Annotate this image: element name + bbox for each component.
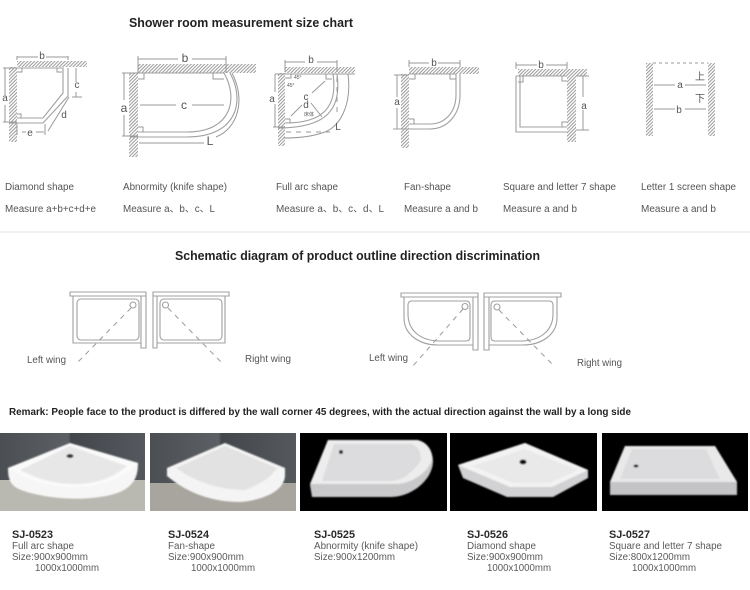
captions: screen shape: Letter 1 screen shape [641, 182, 736, 193]
product: SJ-0523: Size:900x900mm [12, 552, 88, 563]
diagram: full arc shape: 床体 [304, 111, 314, 118]
captions: square shape: Square and letter 7 shape [503, 182, 616, 193]
captions: fan shape [404, 182, 478, 215]
captions: full arc shape [276, 182, 384, 215]
diagram: letter 1 screen shape: 下 [695, 94, 705, 105]
product: SJ-0525 [314, 529, 418, 563]
captions: square shape [503, 182, 616, 215]
diagram: full arc shape: d [303, 100, 309, 111]
product: SJ-0526: Diamond shape [467, 541, 536, 552]
diagram: full arc shape: b [308, 55, 314, 66]
schematic: rectangular right wing [153, 292, 229, 365]
captions: knife shape [123, 182, 227, 215]
product: SJ-0526 [467, 529, 551, 574]
captions: fan shape: Measure a and b [404, 204, 478, 215]
diagram: fan shape [393, 58, 479, 148]
label: left wing: Left wing [27, 355, 66, 366]
schematic: knife right wing [484, 293, 561, 367]
product: SJ-0525: Abnormity (knife shape) [314, 541, 418, 552]
photo: SJ-0523 full arc tray [0, 433, 145, 511]
captions: diamond shape: Measure a+b+c+d+e [5, 204, 96, 215]
label: left wing: Left wing [369, 353, 408, 364]
product: SJ-0523 [12, 529, 99, 574]
product: SJ-0524: Size:900x900mm [168, 552, 244, 563]
diagram: full arc shape: 45° [294, 75, 302, 81]
diagram: diamond shape: e [27, 128, 33, 139]
diagram: knife shape [121, 51, 256, 157]
title: Shower room measurement size chart [129, 15, 354, 30]
diagram: square and letter 7 shape: b [538, 60, 544, 71]
label: right wing: Right wing [577, 358, 622, 369]
captions: square shape: Measure a and b [503, 204, 577, 215]
diagram: knife shape: c [181, 98, 187, 112]
diagram: diamond shape: d [61, 110, 67, 121]
diagram: square and letter 7 shape [516, 60, 589, 142]
diagram: letter 1 screen shape: a [677, 80, 683, 91]
diagram: fan shape: a [394, 97, 400, 108]
diagram: diamond shape [2, 51, 87, 142]
photo: SJ-0527 square tray [602, 433, 748, 511]
diagram: fan shape: b [431, 58, 437, 69]
captions: diamond shape [5, 182, 96, 215]
product: SJ-0523: SJ-0523 [12, 529, 53, 541]
diagram: knife shape: L [207, 134, 214, 148]
product: SJ-0526: SJ-0526 [467, 529, 508, 541]
product: SJ-0527: Size:800x1200mm [609, 552, 690, 563]
diagram: full arc shape: 45° [287, 83, 295, 89]
captions: knife shape: Measure a、b、c、L [123, 204, 215, 215]
product: SJ-0524 [168, 529, 255, 574]
captions: full arc shape: Full arc shape [276, 182, 338, 193]
captions: full arc shape: Measure a、b、c、d、L [276, 204, 384, 215]
captions: screen shape [641, 182, 736, 215]
product: SJ-0526: Size:900x900mm [467, 552, 543, 563]
product: SJ-0526: 1000x1000mm [487, 563, 551, 574]
photo: SJ-0525 knife tray [300, 433, 447, 511]
product: SJ-0523: Full arc shape [12, 541, 74, 552]
schematic: rectangular left wing [70, 292, 146, 365]
diagram: letter 1 screen shape [646, 63, 715, 136]
label: right wing: Right wing [245, 354, 291, 365]
schematic: knife left wing [401, 293, 478, 367]
diagram: full arc shape: c [304, 92, 308, 103]
captions: screen shape: Measure a and b [641, 204, 716, 215]
diagram: knife shape: a [121, 101, 128, 115]
product: SJ-0523: 1000x1000mm [35, 563, 99, 574]
product: SJ-0524: 1000x1000mm [191, 563, 255, 574]
diagram: full arc shape: a [269, 94, 275, 105]
captions: fan shape: Fan-shape [404, 182, 451, 193]
diagram: letter 1 screen shape: b [676, 105, 682, 116]
captions: knife shape: Abnormity (knife shape) [123, 182, 227, 193]
product: SJ-0527: 1000x1000mm [632, 563, 696, 574]
diagram: diamond shape: c [74, 80, 80, 91]
diagram: letter 1 screen shape: 上 [695, 71, 705, 83]
product: SJ-0525: SJ-0525 [314, 529, 355, 541]
diagram: knife shape: b [182, 51, 189, 65]
product: SJ-0524: SJ-0524 [168, 529, 210, 541]
product: SJ-0524: Fan-shape [168, 541, 215, 552]
photo: SJ-0526 diamond tray [450, 433, 597, 511]
product: SJ-0527: SJ-0527 [609, 529, 650, 541]
diagram: diamond shape: a [2, 93, 8, 104]
product: SJ-0527 [609, 529, 722, 574]
product: SJ-0525: Size:900x1200mm [314, 552, 395, 563]
diagram: diamond shape: b [39, 51, 45, 62]
photo: SJ-0524 fan tray [150, 433, 296, 511]
diagram: square and letter 7 shape: a [581, 101, 587, 112]
captions: diamond shape: Diamond shape [5, 182, 74, 193]
remark: Remark: People face to the product is differed by the wall corner 45 degrees, with the actual direction against the wall by a long side [9, 407, 631, 418]
diagram: full arc shape [269, 55, 355, 146]
product: SJ-0527: Square and letter 7 shape [609, 541, 722, 552]
heading: schematic diagram: Schematic diagram of product outline direction discrimination [175, 248, 540, 263]
diagram: full arc shape: L [335, 122, 341, 133]
